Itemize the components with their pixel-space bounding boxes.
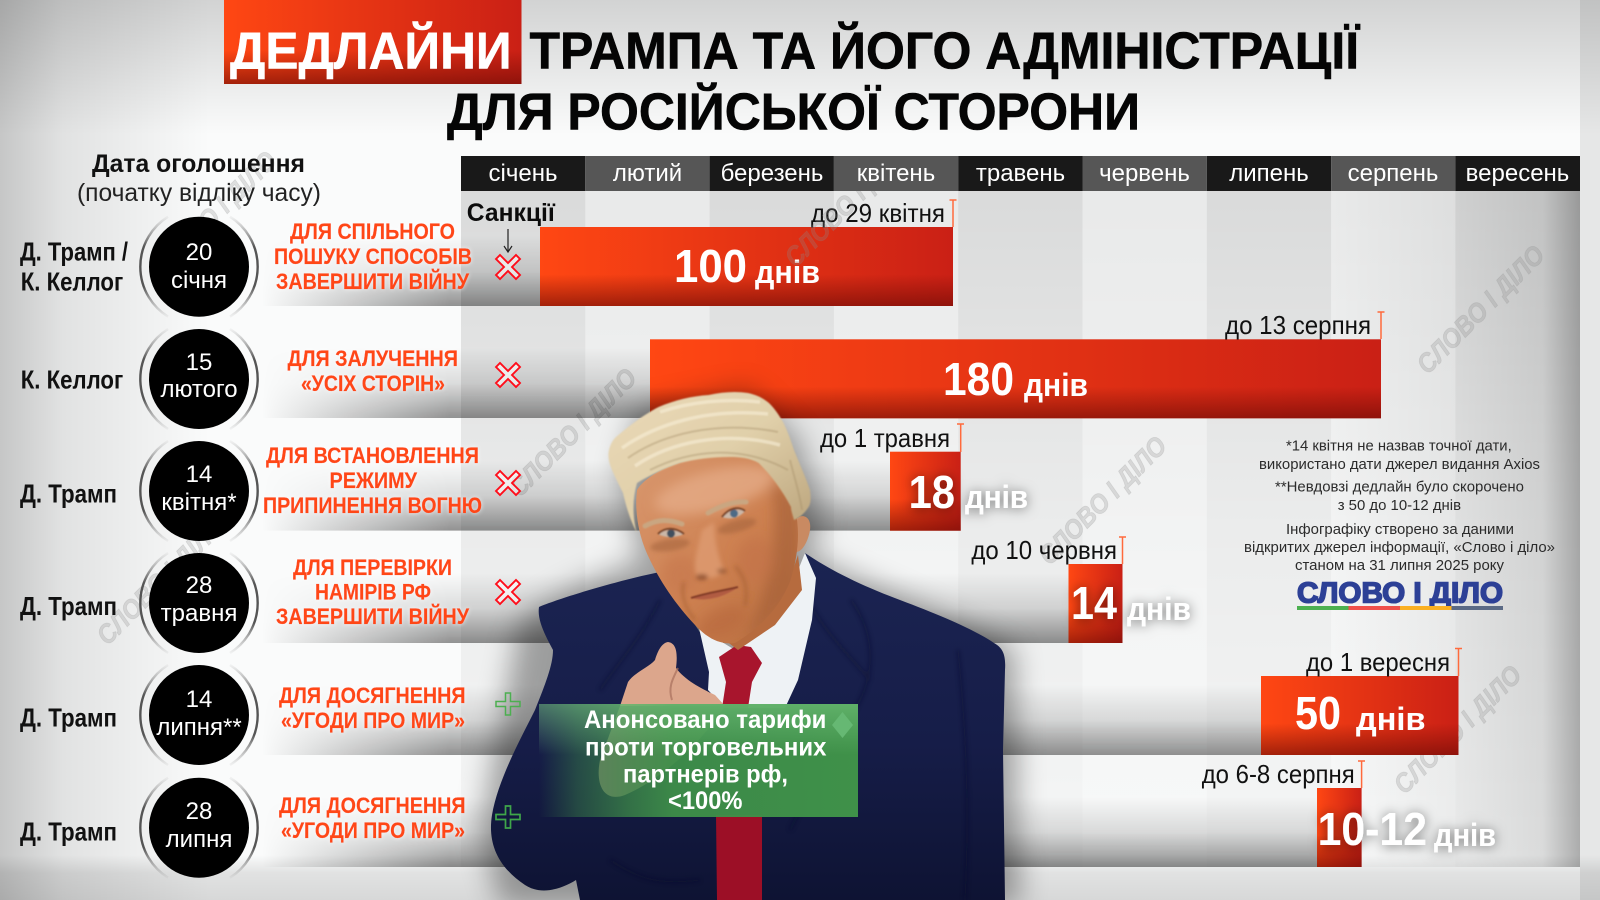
footnotes: станом на 31 липня 2025 року <box>1295 557 1504 574</box>
date circle: 15 February <box>140 329 258 429</box>
sanctions heading with arrow <box>467 199 556 252</box>
watermarks: СЛОВО І ДІЛО <box>91 511 231 651</box>
deadline purposes: РЕЖИМУ <box>330 468 417 493</box>
bar: 14 days: 14 <box>1071 577 1117 629</box>
tariffs callout: проти торговельних <box>585 734 826 762</box>
date circle: 15 February: 15 <box>186 349 212 376</box>
icon: cross row 2 <box>496 363 520 387</box>
date circle: 28 May <box>140 553 258 653</box>
bar: 18 days: днів <box>965 479 1028 515</box>
watermarks: СЛОВО І ДІЛО <box>1388 660 1528 800</box>
footnotes: *14 квітня не назвав точної дати, <box>1286 438 1512 455</box>
date circle: 14 April: квітня* <box>161 489 237 516</box>
month header: травень <box>976 160 1065 187</box>
deadline purposes: ЗАВЕРШИТИ ВІЙНУ <box>276 269 469 294</box>
deadline purposes: ПРИПИНЕННЯ ВОГНЮ <box>263 493 482 518</box>
title line 2: ДЛЯ РОСІЙСЬКОЇ СТОРОНИ <box>447 82 1140 142</box>
facial shading <box>649 456 800 645</box>
row: names of announcers: Д. Трамп <box>20 817 117 847</box>
tariffs callout <box>539 704 858 817</box>
bar: 180 days: днів <box>1024 367 1088 403</box>
date circle: 14 April <box>140 441 258 541</box>
tie <box>716 645 762 900</box>
bar: 14 days <box>971 535 1191 643</box>
watermarks <box>91 146 1551 800</box>
month columns of the timeline <box>461 191 1580 867</box>
sanctions heading with arrow: Санкції <box>467 199 556 227</box>
neck <box>705 555 802 650</box>
bar: 50 days: до 1 вересня <box>1306 647 1450 677</box>
watermark over first bar: СЛОВО І ДІЛО <box>779 133 919 273</box>
date circle: 20 January: січня <box>171 267 227 294</box>
tariffs callout: <100% <box>668 787 742 815</box>
suit <box>491 553 1005 900</box>
month header: січень <box>489 160 557 187</box>
deadline purposes: «УСІХ СТОРІН» <box>301 371 445 396</box>
title highlight box <box>224 0 522 84</box>
date circle: 15 February: лютого <box>160 376 238 403</box>
bar: 10-12 days: 10-12 <box>1318 803 1427 855</box>
tariffs callout: Анонсовано тарифи <box>584 706 826 734</box>
bar: 10-12 days: до 6-8 серпня <box>1202 759 1355 789</box>
mouth <box>691 587 738 599</box>
bar: 10-12 days <box>1202 759 1496 867</box>
ear <box>794 516 810 552</box>
deadline purposes: ДЛЯ ЗАЛУЧЕННЯ <box>288 346 458 371</box>
icon: plus row 6 <box>496 806 520 828</box>
row: names of announcers: К. Келлог <box>21 267 123 297</box>
date circle: 14 April: 14 <box>186 461 212 488</box>
title line 1: ТРАМПА ТА ЙОГО АДМІНІСТРАЦІЇ <box>530 22 1361 80</box>
column heading: announcement date: (початку відліку часу) <box>77 179 321 207</box>
bar: 18 days <box>820 423 1028 531</box>
month header: лютий <box>613 160 682 187</box>
month header: вересень <box>1466 160 1569 187</box>
deadline purposes: «УГОДИ ПРО МИР» <box>281 708 465 733</box>
row shading bands <box>255 236 1317 867</box>
bar: 10-12 days: днів <box>1434 817 1496 853</box>
row: names of announcers <box>20 237 128 847</box>
icon: diamond <box>832 712 853 738</box>
footnotes: Інфографіку створено за даними <box>1286 521 1514 538</box>
row: names of announcers: К. Келлог <box>21 365 123 395</box>
bar: 50 days: днів <box>1356 701 1426 737</box>
row: names of announcers: Д. Трамп <box>20 479 117 509</box>
bar: 180 days: 180 <box>943 353 1014 405</box>
bar: 180 days <box>650 310 1384 418</box>
date circle: 14 July: липня** <box>156 714 242 741</box>
date circle: 28 July <box>140 778 258 878</box>
row: names of announcers: Д. Трамп / <box>20 237 128 267</box>
deadline purposes: ПОШУКУ СПОСОБІВ <box>274 244 472 269</box>
date circle: 28 May: 28 <box>186 572 212 599</box>
bar: 14 days: днів <box>1127 591 1191 627</box>
eyebrows <box>645 502 746 526</box>
bar: 100 days <box>540 198 956 306</box>
eyes <box>658 508 745 538</box>
watermarks: СЛОВО І ДІЛО <box>1033 431 1173 571</box>
row: names of announcers: Д. Трамп <box>20 591 117 621</box>
watermarks: СЛОВО І ДІЛО <box>143 146 283 286</box>
date circle: 20 January: 20 <box>186 239 212 266</box>
title <box>224 0 1361 142</box>
hand shadow line <box>670 668 678 700</box>
footnotes: **Невдовзі дедлайн було скорочено <box>1275 479 1524 496</box>
title line 1 highlighted word: ДЕДЛАЙНИ <box>230 22 512 80</box>
bar: 100 days: до 29 квітня <box>811 198 945 228</box>
date circle: 20 January <box>140 217 258 317</box>
deadline purposes: ДЛЯ СПІЛЬНОГО <box>290 219 455 244</box>
watermarks: СЛОВО І ДІЛО <box>503 363 643 503</box>
bar: 100 days: 100 <box>674 240 747 292</box>
bar: 18 days: до 1 травня <box>820 423 950 453</box>
pointing hand <box>620 642 725 706</box>
figure shadow <box>480 388 1020 900</box>
month header: липень <box>1229 160 1309 187</box>
hair strands <box>622 400 780 466</box>
deadline purposes: «УГОДИ ПРО МИР» <box>281 818 465 843</box>
bar: 100 days: днів <box>755 254 820 290</box>
suit folds <box>600 560 967 900</box>
deadline purposes: ДЛЯ ПЕРЕВІРКИ <box>293 555 452 580</box>
date circle: 14 July: 14 <box>186 686 212 713</box>
shirt <box>699 553 816 708</box>
watermarks: СЛОВО І ДІЛО <box>1411 240 1551 380</box>
deadline purposes: ЗАВЕРШИТИ ВІЙНУ <box>276 604 469 629</box>
month header: квітень <box>857 160 935 187</box>
date circle: 28 May: травня <box>161 600 237 627</box>
deadline purposes: ДЛЯ ДОСЯГНЕННЯ <box>279 793 466 818</box>
hair <box>608 392 811 533</box>
face <box>636 455 798 643</box>
footnotes: з 50 до 10-12 днів <box>1338 497 1461 514</box>
deadline purposes: ДЛЯ ВСТАНОВЛЕННЯ <box>266 443 479 468</box>
footnotes <box>1244 438 1555 574</box>
hand below the callout <box>599 706 725 797</box>
date circle: 28 July: липня <box>166 826 232 853</box>
footnotes: використано дати джерел видання Axios <box>1259 456 1540 473</box>
column heading: announcement date <box>77 150 321 207</box>
month header: березень <box>721 160 823 187</box>
bar: 18 days: 18 <box>909 466 955 518</box>
bar: 14 days: до 10 червня <box>971 535 1117 565</box>
logo: Слово і діло: СЛОВО І ДІЛО <box>1297 578 1503 610</box>
bar: 50 days <box>1261 647 1462 755</box>
deadline purposes <box>263 219 482 843</box>
bar: 50 days: 50 <box>1295 687 1341 739</box>
icon: cross row 3 <box>496 471 520 495</box>
icon: cross row 1 <box>496 255 520 279</box>
date circle: 28 July: 28 <box>186 798 212 825</box>
icon: plus row 5 <box>496 693 520 715</box>
month header: серпень <box>1348 160 1438 187</box>
icon: cross row 4 <box>496 580 520 604</box>
tariffs callout: партнерів рф, <box>623 761 788 789</box>
bar: 180 days: до 13 серпня <box>1225 310 1371 340</box>
month header <box>461 156 1580 191</box>
figure: Donald Trump pointing <box>480 388 1020 900</box>
month header: червень <box>1099 160 1190 187</box>
deadline purposes: ДЛЯ ДОСЯГНЕННЯ <box>279 683 466 708</box>
date circle: 14 July <box>140 665 258 765</box>
deadline purposes: НАМІРІВ РФ <box>315 580 431 604</box>
column heading: announcement date: Дата оголошення <box>92 150 305 178</box>
row: names of announcers: Д. Трамп <box>20 703 117 733</box>
footnotes: відкритих джерел інформації, «Слово і діло» <box>1244 539 1555 556</box>
